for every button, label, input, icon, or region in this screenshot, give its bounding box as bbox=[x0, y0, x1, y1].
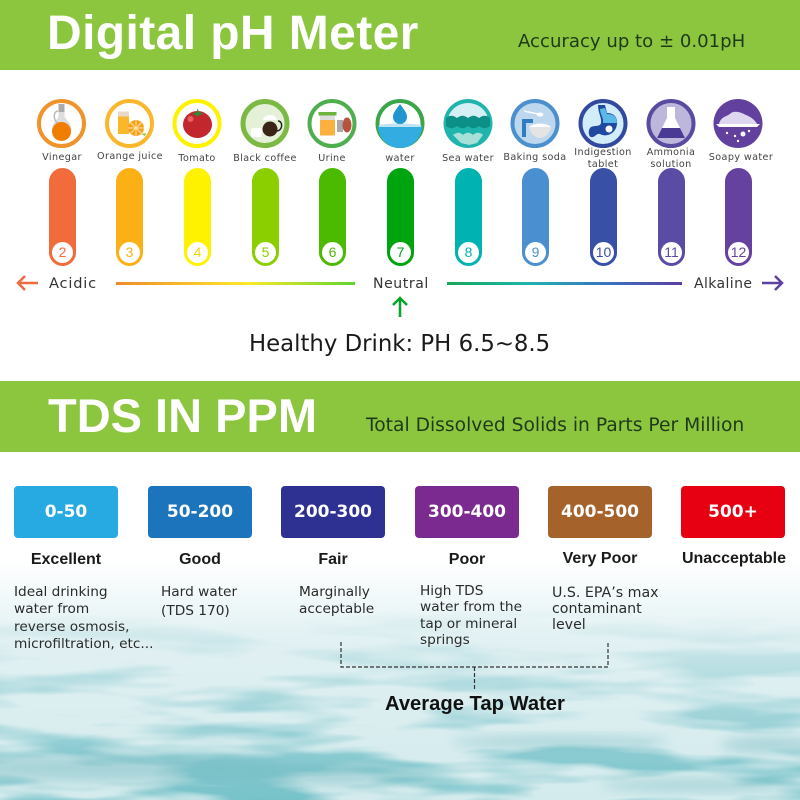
label: Ammonia solution: solution bbox=[650, 158, 692, 170]
icon: soapy water bbox=[714, 99, 762, 148]
rating: Excellent: Excellent bbox=[31, 551, 101, 568]
TDS box 300-400 bbox=[415, 486, 519, 538]
pH bar 9: 9 bbox=[532, 244, 539, 260]
TDS box 300-400: 300-400 bbox=[428, 502, 506, 522]
header band: TDS in PPM bbox=[0, 381, 800, 452]
icon: ammonia solution bbox=[646, 99, 696, 148]
label: Baking soda: Baking soda bbox=[503, 152, 567, 163]
icon: black coffee bbox=[240, 99, 290, 148]
label: Tomato: Tomato bbox=[178, 153, 216, 164]
description: Good: (TDS 170) bbox=[161, 602, 230, 618]
label: Soapy water: Soapy water bbox=[709, 152, 773, 163]
subheading: Total Dissolved Solids in Parts Per Million bbox=[366, 415, 744, 436]
icon: vinegar bbox=[37, 99, 86, 148]
description: Excellent bbox=[14, 584, 153, 652]
rating: Poor: Poor bbox=[449, 551, 485, 568]
pH bar 4 bbox=[184, 168, 211, 266]
healthy drink text: Healthy Drink: PH 6.5~8.5 bbox=[249, 331, 550, 357]
icon: sea water bbox=[444, 99, 492, 148]
icon: water bbox=[376, 99, 424, 148]
icon: orange juice bbox=[105, 99, 154, 148]
label: Black coffee: Black coffee bbox=[233, 153, 297, 164]
pH bar 11 bbox=[658, 168, 685, 266]
subtitle: Accuracy up to ± 0.01pH bbox=[518, 31, 745, 52]
label: Alkaline: Alkaline bbox=[694, 276, 752, 292]
rating: Unacceptable: Unacceptable bbox=[682, 550, 786, 567]
arrow: alkaline bbox=[762, 275, 784, 291]
pH bar 11: 11 bbox=[664, 244, 679, 260]
label: Neutral: Neutral bbox=[373, 276, 429, 292]
description: Very Poor: level bbox=[552, 617, 586, 633]
title: Digital pH Meter bbox=[47, 7, 419, 60]
rating: Good: Good bbox=[179, 551, 221, 568]
pH bar 8 bbox=[455, 168, 482, 266]
pH bar 10 bbox=[590, 168, 617, 266]
label: Orange juice: Orange juice bbox=[97, 151, 163, 162]
icon: baking soda bbox=[510, 99, 560, 148]
description: Excellent: reverse osmosis, bbox=[14, 619, 129, 635]
pH bar 3: 3 bbox=[126, 244, 133, 260]
description: Poor: High TDS bbox=[420, 583, 483, 599]
description: Excellent: microfiltration, etc... bbox=[14, 636, 153, 652]
description: Very Poor bbox=[552, 585, 659, 633]
label: Acidic: Acidic bbox=[49, 275, 97, 292]
label: Vinegar: Vinegar bbox=[42, 152, 82, 163]
pH bar 6 bbox=[319, 168, 346, 266]
label: water: water bbox=[385, 153, 415, 164]
description: Fair: acceptable bbox=[299, 601, 374, 617]
label: Average Tap Water: Average Tap Water bbox=[385, 693, 565, 715]
TDS box 500+ bbox=[681, 486, 785, 538]
label: Urine: Urine bbox=[318, 153, 346, 164]
TDS box 400-500 bbox=[548, 486, 652, 538]
icon: tomato bbox=[172, 99, 222, 148]
gradient line: alkaline bbox=[447, 282, 682, 284]
description: Good bbox=[161, 584, 238, 618]
TDS box 400-500: 400-500 bbox=[561, 502, 639, 522]
icon: urine bbox=[308, 99, 356, 148]
label: Indigestion tablet: Indigestion bbox=[574, 147, 632, 158]
label: Ammonia solution: Ammonia bbox=[647, 147, 695, 158]
arrow: acidic bbox=[16, 275, 38, 291]
TDS box 0-50 bbox=[14, 486, 118, 538]
pH bar 9 bbox=[522, 168, 549, 266]
pH bar 6: 6 bbox=[329, 244, 336, 260]
description: Poor: springs bbox=[420, 632, 470, 648]
gradient line: acidic bbox=[116, 282, 355, 284]
description: Fair bbox=[299, 584, 374, 617]
header band: Digital pH Meter bbox=[0, 0, 800, 70]
TDS box 0-50: 0-50 bbox=[45, 502, 87, 522]
water background bbox=[0, 582, 800, 800]
pH bar 12 bbox=[725, 168, 752, 266]
description: Excellent: Ideal drinking bbox=[14, 584, 108, 600]
label: Sea water: Sea water bbox=[442, 153, 494, 164]
description: Excellent: water from bbox=[14, 601, 89, 617]
label: Indigestion tablet: tablet bbox=[588, 158, 618, 170]
description: Poor: water from the bbox=[420, 599, 522, 615]
TDS box 50-200: 50-200 bbox=[167, 502, 233, 522]
pH bar 3 bbox=[116, 168, 143, 266]
description: Good: Hard water bbox=[161, 584, 237, 600]
heading: TDS IN PPM bbox=[48, 389, 317, 442]
TDS box 200-300 bbox=[281, 486, 385, 538]
pH bar 7 bbox=[387, 168, 414, 266]
description: Poor bbox=[420, 583, 522, 648]
pH bar 4: 4 bbox=[194, 244, 201, 260]
TDS box 500+: 500+ bbox=[708, 502, 758, 522]
rating: Very Poor: Very Poor bbox=[563, 550, 637, 567]
TDS box 50-200 bbox=[148, 486, 252, 538]
icon: indigestion tablet bbox=[578, 99, 628, 148]
pH bar 8: 8 bbox=[465, 244, 472, 260]
bracket: average tap water bbox=[340, 642, 609, 689]
pH bar 10: 10 bbox=[596, 244, 611, 260]
arrow: neutral bbox=[392, 296, 408, 317]
pH bar 7: 7 bbox=[397, 244, 404, 260]
pH bar 2 bbox=[49, 168, 76, 266]
pH bar 2: 2 bbox=[59, 244, 66, 260]
label: Indigestion tablet bbox=[574, 147, 632, 170]
description: Very Poor: U.S. EPA’s max bbox=[552, 585, 659, 601]
pH bar 12: 12 bbox=[731, 244, 746, 260]
rating: Fair: Fair bbox=[318, 551, 348, 568]
label: Ammonia solution bbox=[646, 147, 695, 170]
description: Fair: Marginally bbox=[299, 584, 370, 600]
description: Poor: tap or mineral bbox=[420, 616, 517, 632]
pH bar 5 bbox=[252, 168, 279, 266]
description: Very Poor: contaminant bbox=[552, 601, 642, 617]
pH bar 5: 5 bbox=[262, 244, 269, 260]
TDS box 200-300: 200-300 bbox=[294, 502, 372, 522]
